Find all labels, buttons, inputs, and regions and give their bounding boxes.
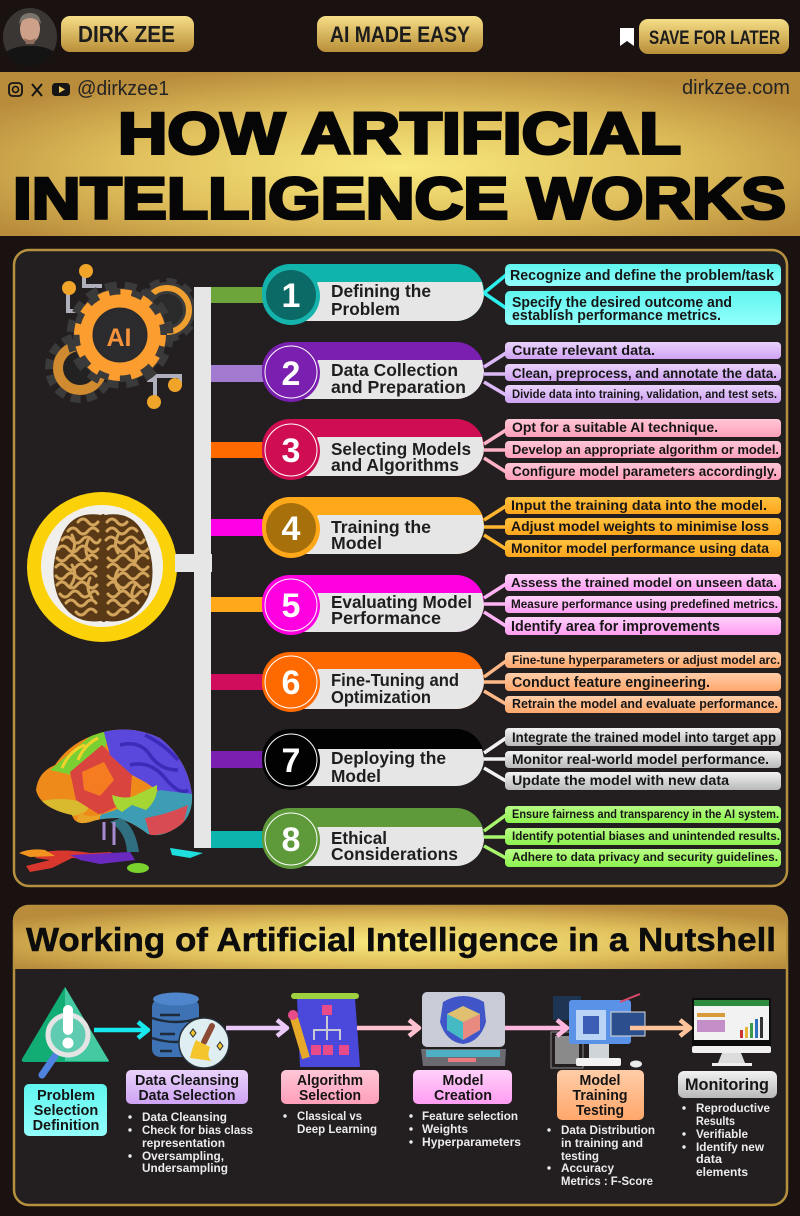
step 5: Performance [331, 608, 441, 628]
stage: data [126, 1070, 253, 1175]
stage: problem: Problem [37, 1088, 95, 1104]
icon: AI gears: AI [106, 324, 132, 352]
step 1: establish performance metrics. [512, 308, 721, 324]
stage: model creation: Feature selection [422, 1111, 518, 1123]
stage: training: Metrics : F-Score [561, 1176, 653, 1188]
stage: data: Oversampling, [142, 1151, 224, 1163]
step 3: 3 [282, 432, 300, 470]
stage: data: representation [142, 1138, 225, 1150]
stage: training: Data Distribution [561, 1125, 655, 1137]
step 1: Defining the [331, 281, 431, 301]
stage: algorithm: Deep Learning [297, 1124, 377, 1136]
step 8: Considerations [331, 844, 458, 864]
stage: monitoring: Results [696, 1116, 735, 1128]
step 6: Optimization [331, 687, 431, 707]
title: INTELLIGENCE WORKS [13, 166, 786, 232]
title banner [0, 72, 800, 236]
icon: AI gears [49, 264, 196, 409]
step 2: 2 [282, 355, 300, 393]
stage: monitoring: elements [696, 1167, 748, 1179]
step 1: Problem [331, 299, 400, 319]
step 4: Training the [331, 517, 431, 537]
name button [61, 16, 194, 52]
step 5: 5 [282, 587, 300, 625]
avatar photo [2, 7, 58, 67]
nutshell heading [14, 906, 786, 969]
stage: monitoring: Verifiable [696, 1129, 748, 1141]
stage: training: in training and [561, 1138, 643, 1150]
step 5 [211, 574, 781, 635]
stage: model creation: Model [442, 1073, 484, 1089]
step 2: Curate relevant data. [512, 342, 655, 358]
stage: monitoring: Identify new [696, 1142, 764, 1154]
name button: DIRK ZEE [78, 21, 175, 47]
step 7: Deploying the [331, 748, 446, 768]
stage: problem: Definition [33, 1118, 99, 1134]
step 8: Ethical [331, 828, 387, 848]
stage: monitoring: Monitoring [685, 1075, 769, 1094]
step 2: Divide data into training, validation, and test sets. [512, 389, 777, 401]
step 3: Develop an appropriate algorithm or model. [512, 442, 779, 457]
stage: algorithm [281, 1070, 379, 1136]
icon: monitoring monitor [692, 998, 771, 1066]
social icons [9, 83, 70, 96]
step 6: Fine-tune hyperparameters or adjust model arc. [512, 653, 780, 667]
step 7: Integrate the trained model into target app [512, 730, 776, 745]
top bar [2, 7, 789, 67]
arrows [94, 1020, 690, 1038]
panel: nutshell [14, 906, 787, 1205]
tagline button: AI MADE EASY [330, 22, 470, 47]
icon: database broom [152, 992, 229, 1068]
step 2 [211, 342, 781, 403]
step 6: Conduct feature engineering. [512, 675, 710, 691]
step 1 [211, 264, 781, 325]
step 6 [211, 652, 781, 713]
step 7 [211, 728, 781, 790]
stage: data: Undersampling [142, 1163, 228, 1175]
stage: training: Accuracy [561, 1163, 615, 1175]
stage: monitoring [678, 1071, 777, 1179]
nutshell heading: Working of Artificial Intelligence in a Nutshell [26, 921, 776, 958]
step 4: Model [331, 533, 382, 553]
step 8: 8 [282, 821, 300, 859]
step 5: Identify area for improvements [511, 619, 720, 635]
step 3: Selecting Models [331, 439, 471, 459]
step 7: Update the model with new data [512, 772, 729, 788]
stage: training [547, 1070, 655, 1188]
stage: data: Data Selection [138, 1088, 236, 1104]
stage: training: Training [572, 1088, 628, 1104]
step 2: Clean, preprocess, and annotate the data. [512, 366, 777, 381]
step 4: 4 [282, 510, 301, 548]
icon: bookmark [620, 28, 634, 46]
step 5: Measure performance using predefined metrics. [511, 597, 778, 611]
stage: monitoring: Reproductive [696, 1103, 770, 1115]
stage: algorithm: Algorithm [297, 1073, 363, 1089]
save button [639, 19, 789, 54]
stage: model creation: Creation [434, 1088, 492, 1104]
stage: training: Testing [576, 1103, 624, 1119]
stage: model creation [409, 1070, 521, 1149]
step 3 [211, 419, 781, 480]
step 5: Assess the trained model on unseen data. [511, 575, 777, 590]
step 4: Input the training data into the model. [511, 498, 767, 513]
tagline button [317, 16, 483, 52]
stage: monitoring: data [696, 1154, 723, 1166]
step 4 [211, 497, 781, 558]
stage: data: Data Cleansing [135, 1073, 239, 1089]
website: dirkzee.com [682, 77, 790, 99]
step 6: Retrain the model and evaluate performance. [512, 697, 778, 711]
step 7: Model [331, 766, 381, 786]
stage: data: Data Cleansing [142, 1112, 227, 1124]
stage: training: Model [580, 1073, 620, 1089]
stage: model creation: Weights [422, 1124, 468, 1136]
step 1: Specify the desired outcome and [512, 295, 732, 311]
step 4: Adjust model weights to minimise loss [511, 519, 769, 534]
stage: algorithm: Selection [299, 1088, 361, 1104]
title: HOW ARTIFICIAL [118, 102, 681, 166]
step 1: 1 [282, 277, 300, 315]
stage: algorithm: Classical vs [297, 1111, 362, 1123]
icon: rainbow brain [19, 725, 203, 873]
icon: brain badge [27, 492, 177, 642]
icon: laptop [421, 992, 506, 1066]
step 4: Monitor model performance using data [511, 541, 770, 556]
stage: model creation: Hyperparameters [422, 1137, 521, 1149]
step 8 [211, 806, 781, 869]
stage: problem [24, 1084, 107, 1136]
icon: warning magnifier [22, 987, 109, 1075]
paint splash [26, 850, 112, 872]
step 1: Recognize and define the problem/task [510, 268, 775, 284]
title [13, 102, 786, 232]
step 3: Opt for a suitable AI technique. [512, 419, 718, 435]
step 3: and Algorithms [331, 455, 459, 475]
timeline spine [175, 287, 212, 848]
icon: training monitor [551, 994, 645, 1068]
step 6: Fine-Tuning and [331, 670, 459, 690]
stage: problem: Selection [34, 1103, 98, 1119]
panel: steps [14, 250, 787, 886]
step 6: 6 [282, 664, 300, 702]
step 2: and Preparation [331, 377, 466, 397]
stage: training: testing [561, 1151, 599, 1163]
step 2: Data Collection [331, 360, 458, 380]
social handle: @dirkzee1 [77, 78, 169, 100]
step 3: Configure model parameters accordingly. [512, 464, 777, 479]
step 7: 7 [282, 742, 300, 780]
step 8: Identify potential biases and unintended results. [512, 829, 780, 843]
stage: data: Check for bias class [142, 1125, 253, 1137]
step 5: Evaluating Model [331, 592, 472, 612]
step 7: Monitor real-world model performance. [512, 752, 769, 767]
icon: algorithm board [288, 993, 360, 1067]
step 8: Adhere to data privacy and security guidelines. [512, 850, 778, 864]
step 8: Ensure fairness and transparency in the AI system. [512, 807, 779, 821]
